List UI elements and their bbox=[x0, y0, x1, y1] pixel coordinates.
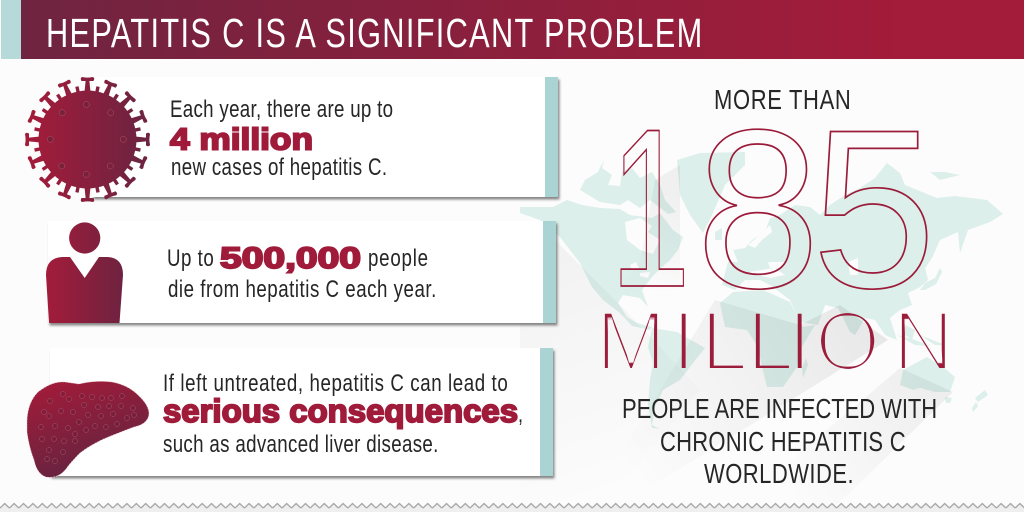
Africa bbox=[720, 290, 815, 387]
icon: liver bbox=[27, 381, 149, 477]
title: HEPATITIS C IS A SIGNIFICANT PROBLEM bbox=[46, 10, 702, 56]
card text: Each year, there are up to bbox=[170, 96, 393, 123]
text: people infected: CHRONIC HEPATITIS C bbox=[660, 427, 906, 458]
text: more than: MORE THAN bbox=[714, 85, 851, 116]
card text: new cases of hepatitis C. bbox=[171, 154, 387, 181]
big number: 185: 1 bbox=[610, 82, 690, 335]
card text bbox=[167, 242, 436, 303]
card body bbox=[92, 77, 558, 197]
world map bbox=[520, 152, 1003, 429]
card text: such as advanced liver disease. bbox=[163, 431, 438, 458]
card text: 500,000 bbox=[220, 242, 361, 275]
card text bbox=[163, 370, 523, 458]
header teal tab bbox=[1, 0, 21, 59]
card text: people bbox=[368, 245, 428, 272]
card text: If left untreated, hepatitis C can lead to bbox=[163, 370, 508, 397]
card text bbox=[170, 96, 393, 181]
icon: virus bbox=[25, 77, 150, 202]
big number: 185 bbox=[610, 82, 936, 335]
card body bbox=[48, 221, 556, 323]
panel: consequences bbox=[50, 348, 553, 476]
text: people infected bbox=[622, 394, 937, 490]
icon: person bbox=[46, 222, 123, 323]
Arctic islands bbox=[580, 160, 676, 214]
card body bbox=[50, 348, 553, 476]
big number: 185: 8 bbox=[696, 82, 820, 335]
North America bbox=[520, 200, 683, 330]
panel: new cases bbox=[92, 77, 558, 197]
text: people infected: PEOPLE ARE INFECTED WITH bbox=[622, 394, 937, 425]
bottom zigzag edge bbox=[0, 500, 1024, 512]
South America bbox=[648, 328, 705, 429]
Greenland bbox=[677, 152, 745, 233]
virus spots bbox=[47, 102, 126, 177]
islands bbox=[702, 172, 988, 412]
Australia bbox=[900, 357, 955, 392]
card text: , bbox=[518, 401, 523, 428]
card text: serious consequences bbox=[163, 393, 518, 429]
header gradient bbox=[21, 0, 1024, 59]
text: people infected: WORLDWIDE. bbox=[704, 459, 854, 490]
map seas bbox=[625, 218, 858, 278]
big word: million: MILLION bbox=[596, 294, 954, 388]
Eurasia bbox=[722, 163, 1003, 340]
card text: Up to bbox=[167, 245, 214, 272]
panel: deaths bbox=[48, 221, 556, 323]
card text: 4 million bbox=[170, 122, 313, 156]
card text: die from hepatitis C each year. bbox=[168, 276, 436, 303]
big number: 185: 5 bbox=[812, 82, 936, 335]
liver bumps bbox=[38, 392, 136, 464]
header bar bbox=[1, 0, 1024, 59]
long shadows bbox=[520, 165, 953, 512]
